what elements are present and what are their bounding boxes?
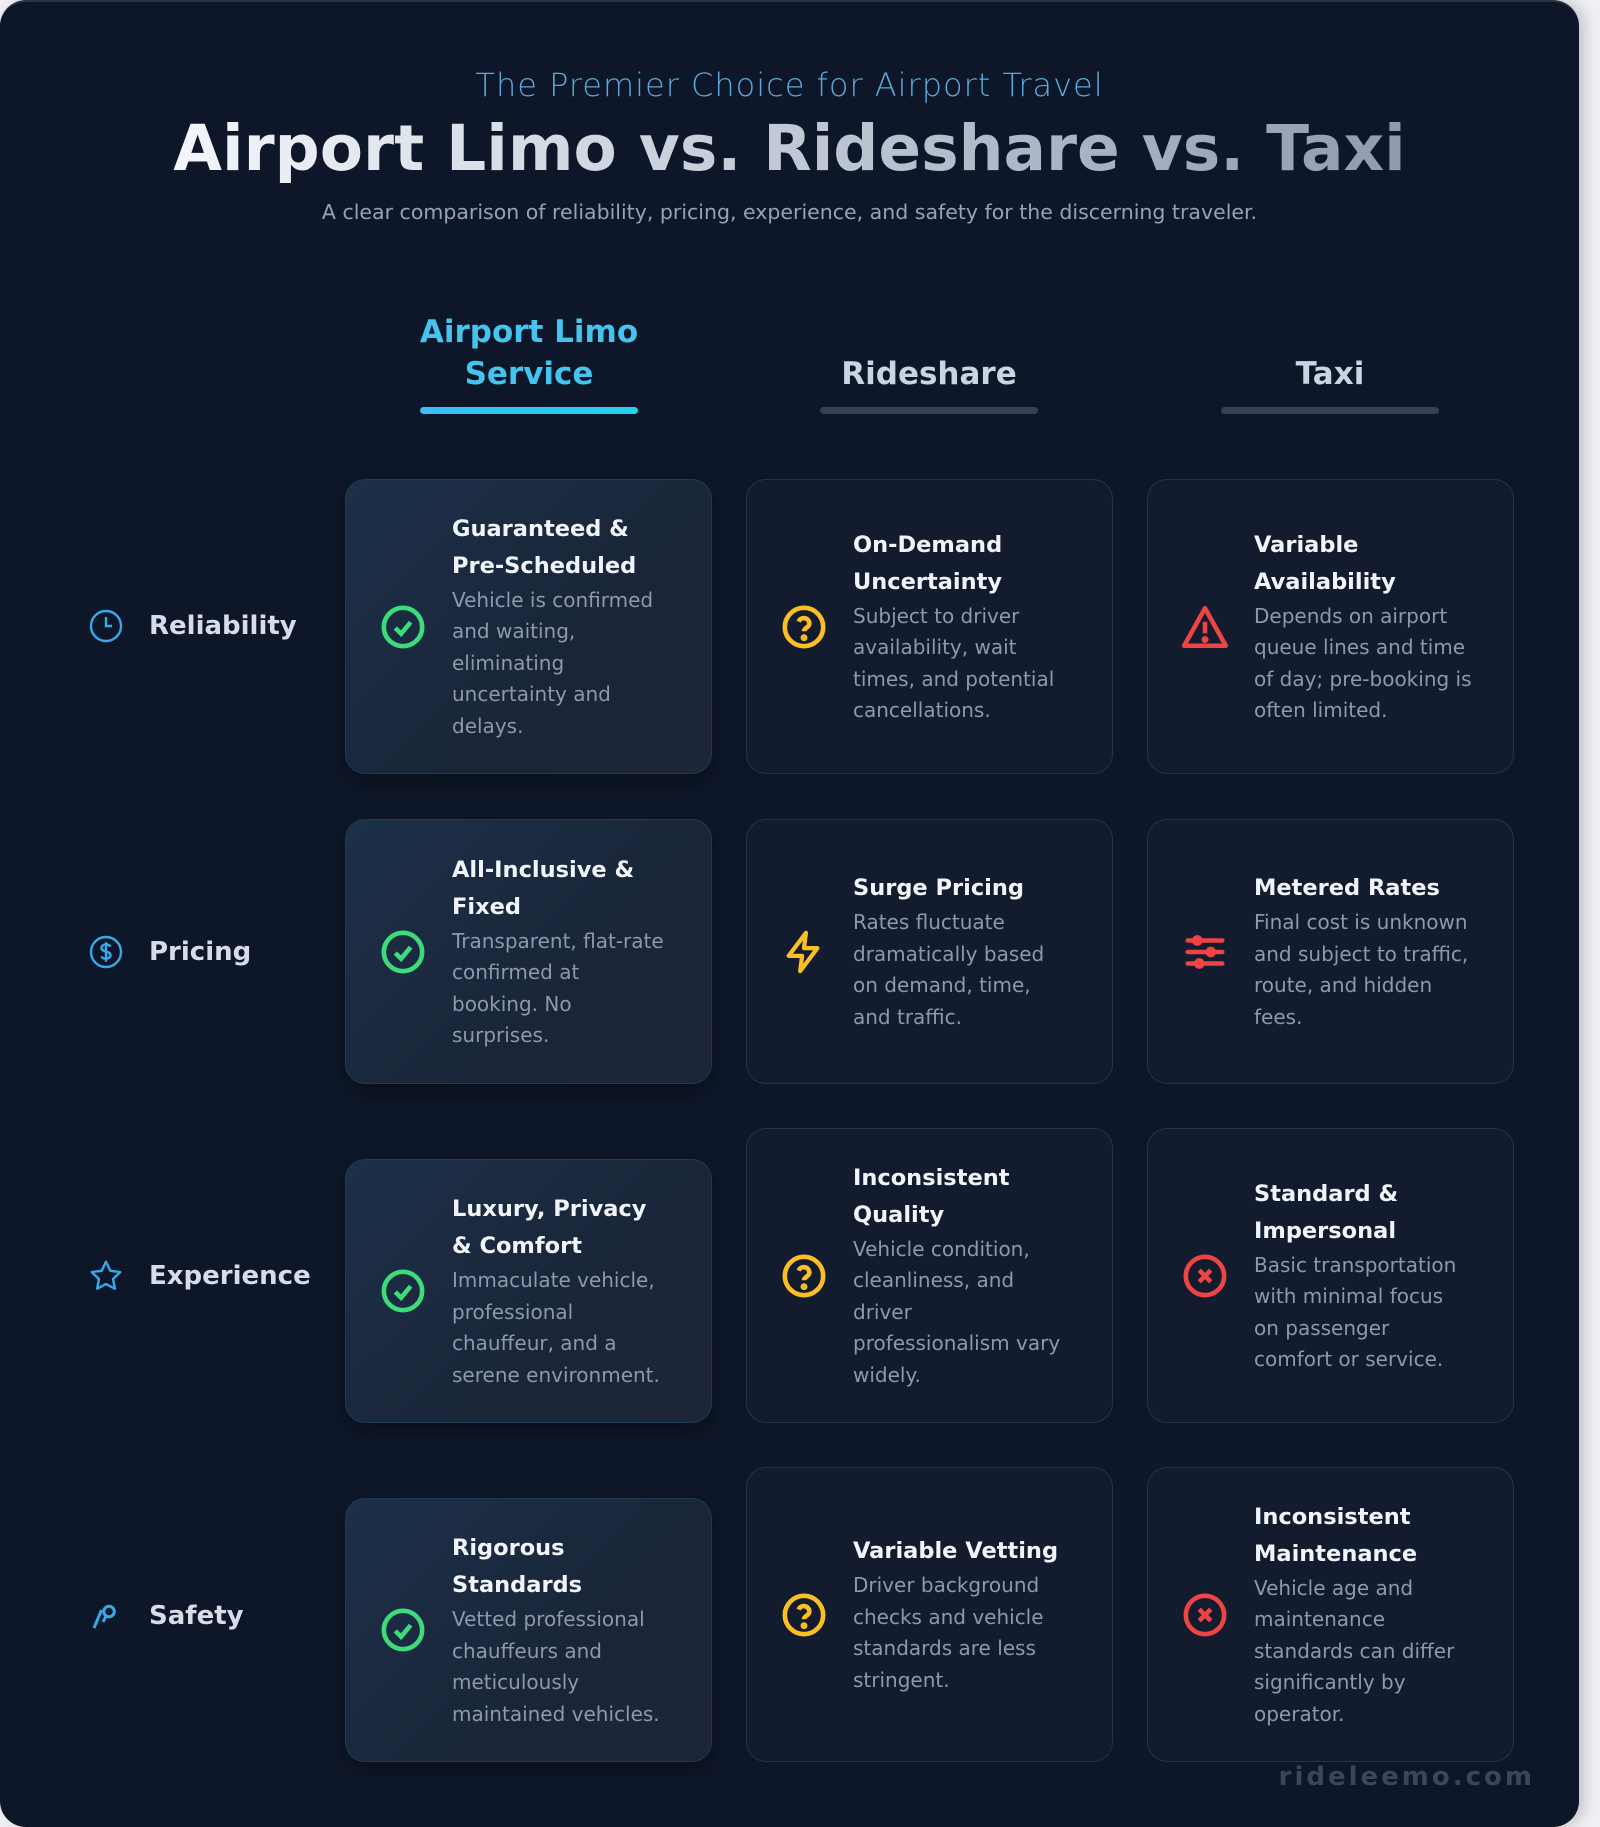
card: taxi pricing: Metered Rates — [1254, 875, 1440, 901]
column header: limo: Airport Limo — [420, 314, 638, 350]
card: limo safety: Vetted professional chauffeurs and meticulously maintained vehicles. — [452, 1607, 660, 1726]
card: taxi experience: Basic transportation — [1254, 1252, 1456, 1276]
card: limo pricing: confirmed at — [452, 960, 579, 984]
card: rideshare pricing: dramatically based — [853, 942, 1044, 966]
card: limo reliability — [345, 479, 712, 774]
card: rideshare experience: professionalism vary — [853, 1331, 1060, 1355]
row label: experience: Experience — [149, 1261, 311, 1291]
card: limo safety — [345, 1498, 712, 1762]
card: limo reliability: Guaranteed & Pre-Scheduled — [452, 516, 636, 579]
card: taxi experience — [1147, 1128, 1514, 1423]
column header: limo: Service — [465, 356, 593, 392]
card: limo pricing: Transparent, flat-rate — [452, 928, 664, 952]
card: taxi experience: with minimal focus — [1254, 1284, 1443, 1308]
card: limo experience: Immaculate vehicle, professional chauffeur, and a serene environment. — [452, 1268, 660, 1386]
card: limo reliability: Vehicle is confirmed and waiting, eliminating uncertainty and delays. — [452, 588, 653, 738]
card: limo experience — [345, 1159, 712, 1423]
column header: taxi — [1221, 356, 1439, 414]
card: limo pricing — [345, 819, 712, 1084]
card: taxi reliability — [1147, 479, 1514, 774]
column header: rideshare — [820, 356, 1038, 414]
row label: pricing: Pricing — [149, 937, 251, 967]
card: rideshare reliability — [746, 479, 1113, 774]
column header: taxi: Taxi — [1296, 356, 1364, 392]
card: rideshare safety — [746, 1467, 1113, 1762]
row label: safety — [92, 1601, 244, 1631]
card: rideshare pricing: and traffic. — [853, 1004, 962, 1028]
card: limo pricing: All-Inclusive & Fixed — [452, 856, 634, 920]
card: taxi experience: Standard & Impersonal — [1254, 1180, 1398, 1244]
column header: limo — [420, 314, 638, 414]
card: rideshare pricing: Rates fluctuate — [853, 910, 1005, 934]
subtitle: The Premier Choice for Airport Travel — [475, 66, 1104, 104]
card: rideshare pricing: on demand, time, — [853, 973, 1031, 997]
card: limo pricing: surprises. — [452, 1023, 549, 1047]
card: rideshare pricing — [746, 819, 1113, 1084]
card: rideshare reliability: Subject to driver availability, wait times, and potential cancellations. — [853, 604, 1054, 722]
card: limo experience: Luxury, Privacy — [452, 1196, 646, 1222]
card: rideshare experience: Vehicle condition, — [853, 1237, 1030, 1261]
card: rideshare pricing: Surge Pricing — [853, 875, 1024, 901]
card: limo safety: Rigorous Standards — [452, 1535, 582, 1598]
card: rideshare reliability: On-Demand Uncertainty — [853, 532, 1002, 594]
card: limo pricing: booking. No — [452, 992, 572, 1016]
card: rideshare experience: widely. — [853, 1363, 921, 1387]
row label: reliability: Reliability — [149, 611, 297, 641]
card: taxi pricing: Final cost is unknown and subject to traffic, route, and hidden fees. — [1254, 910, 1468, 1028]
card: taxi reliability: Variable Availability — [1254, 532, 1396, 594]
card: taxi pricing — [1147, 819, 1514, 1084]
card: limo experience: & Comfort — [452, 1233, 582, 1259]
card: taxi safety — [1147, 1467, 1514, 1762]
card: rideshare safety: Driver background checks and vehicle standards are less stringent. — [853, 1573, 1044, 1692]
card: taxi experience: on passenger — [1254, 1316, 1389, 1340]
row label: pricing — [90, 936, 251, 968]
watermark: rideleemo.com — [1279, 1762, 1535, 1792]
column header: rideshare: Rideshare — [841, 356, 1017, 392]
card: rideshare experience: cleanliness, and — [853, 1268, 1014, 1292]
card: taxi safety: Inconsistent Maintenance — [1254, 1504, 1417, 1567]
card: taxi reliability: Depends on airport queue lines and time of day; pre-booking is often limited. — [1254, 604, 1472, 722]
card: taxi safety: Vehicle age and maintenance standards can differ significantly by operator. — [1254, 1576, 1454, 1726]
description: A clear comparison of reliability, pricing, experience, and safety for the discerning traveler. — [322, 200, 1257, 224]
card: rideshare experience — [746, 1128, 1113, 1423]
row label: reliability — [90, 610, 297, 642]
card: taxi experience: comfort or service. — [1254, 1347, 1443, 1371]
card: rideshare safety: Variable Vetting — [853, 1538, 1058, 1564]
card: rideshare experience: driver — [853, 1300, 912, 1324]
title: Airport Limo vs. Rideshare vs. Taxi — [173, 112, 1406, 185]
card: rideshare experience: Inconsistent Quality — [853, 1165, 1010, 1228]
row label: safety: Safety — [149, 1601, 244, 1631]
